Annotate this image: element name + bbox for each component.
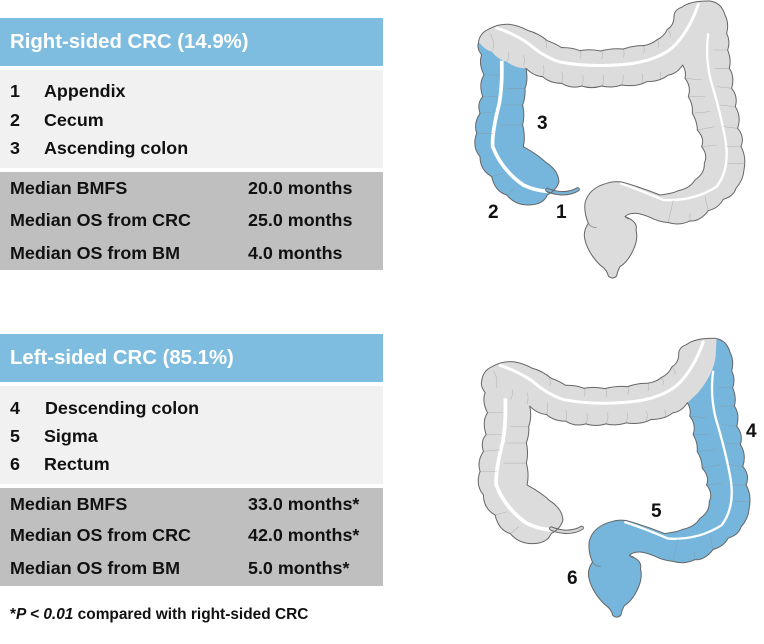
stats: right-sided survival: Median OS from CRC bbox=[10, 210, 191, 230]
list: right-sided locations: 1 bbox=[10, 81, 20, 101]
heading: left-sided CRC: Left-sided CRC (85.1%) bbox=[10, 347, 234, 369]
number labels: left side: 5 bbox=[651, 501, 662, 522]
list: left-sided locations: Rectum bbox=[44, 454, 110, 474]
stats: left-sided survival: Median BMFS bbox=[10, 494, 127, 514]
stats: right-sided survival: Median OS from BM bbox=[10, 243, 180, 263]
highlight: ascending colon and cecum bbox=[475, 42, 559, 205]
stats: right-sided survival: 25.0 months bbox=[248, 210, 352, 230]
stats: right-sided survival: 20.0 months bbox=[248, 178, 352, 198]
stats: right-sided survival: Median BMFS bbox=[10, 178, 127, 198]
stats: left-sided survival bbox=[0, 488, 383, 586]
number labels: right side: 3 bbox=[537, 113, 548, 134]
highlight: descending colon, sigma and rectum bbox=[588, 338, 750, 617]
list: right-sided locations: Appendix bbox=[44, 81, 126, 101]
stats: left-sided survival: 42.0 months* bbox=[248, 525, 359, 545]
heading: left-sided CRC bbox=[0, 334, 383, 382]
list: right-sided locations: 2 bbox=[10, 110, 20, 130]
stats: left-sided survival: Median OS from BM bbox=[10, 558, 180, 578]
stats: right-sided survival: 4.0 months bbox=[248, 243, 342, 263]
number labels: right side: 2 bbox=[488, 202, 499, 223]
list: left-sided locations: Sigma bbox=[44, 426, 98, 446]
number labels: right side bbox=[488, 113, 567, 223]
number labels: left side: 6 bbox=[567, 568, 578, 589]
stats: right-sided survival bbox=[0, 172, 383, 270]
number labels: left side: 4 bbox=[746, 421, 757, 442]
footnote: *P < 0.01 compared with right-sided CRC bbox=[10, 606, 308, 623]
heading: right-sided CRC bbox=[0, 18, 383, 66]
stats: left-sided survival: 33.0 months* bbox=[248, 494, 359, 514]
list: left-sided locations: 5 bbox=[10, 426, 20, 446]
list: right-sided locations: Ascending colon bbox=[44, 138, 188, 158]
list: left-sided locations: Descending colon bbox=[45, 398, 199, 418]
list: left-sided locations bbox=[0, 386, 383, 484]
list: left-sided locations: 6 bbox=[10, 454, 20, 474]
list: right-sided locations: Cecum bbox=[44, 110, 104, 130]
list: right-sided locations: 3 bbox=[10, 138, 20, 158]
diagram: colon with left side highlighted bbox=[478, 338, 750, 617]
list: right-sided locations bbox=[0, 70, 383, 168]
panel: right-sided CRC table bbox=[0, 18, 383, 270]
list: left-sided locations: 4 bbox=[10, 398, 20, 418]
panel: left-sided CRC table bbox=[0, 334, 383, 586]
number labels: right side: 1 bbox=[556, 202, 567, 223]
number labels: left side bbox=[567, 421, 757, 589]
diagram: colon with right side highlighted bbox=[475, 1, 745, 278]
stats: left-sided survival: Median OS from CRC bbox=[10, 525, 191, 545]
stats: left-sided survival: 5.0 months* bbox=[248, 558, 349, 578]
heading: right-sided CRC: Right-sided CRC (14.9%) bbox=[10, 31, 248, 53]
